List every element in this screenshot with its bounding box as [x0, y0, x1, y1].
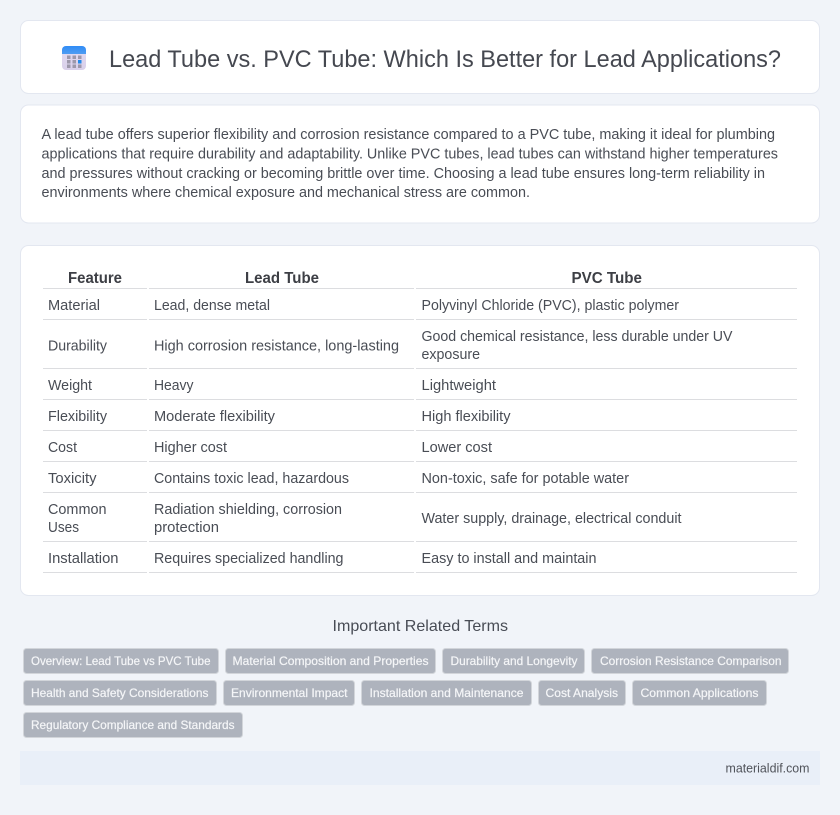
row: material	[48, 298, 679, 314]
row: common uses: Water supply, drainage, electrical conduit	[422, 511, 682, 527]
row: installation: Easy to install and maintain	[422, 551, 596, 567]
tags: related terms	[24, 648, 788, 738]
row: durability: High corrosion resistance, long-lasting	[154, 338, 399, 354]
row: common uses: Uses	[48, 520, 79, 536]
tags: related terms: Health and Safety Considerations	[31, 686, 208, 700]
row: material: Material	[48, 298, 100, 314]
text block: introduction: environments where chemical exposure and mechanical stress are common.	[42, 185, 530, 201]
heading: related terms: Important Related Terms	[332, 618, 508, 635]
row: durability	[48, 329, 733, 363]
row: toxicity: Non-toxic, safe for potable water	[422, 471, 629, 487]
row: weight: Weight	[48, 378, 92, 394]
tags: related terms: Corrosion Resistance Comparison	[600, 654, 782, 668]
tags: related terms: Cost Analysis	[546, 686, 618, 700]
row: cost	[48, 440, 492, 456]
row: common uses	[48, 502, 682, 536]
row: weight	[48, 378, 496, 394]
table header row: Feature	[68, 270, 122, 287]
row: flexibility: High flexibility	[422, 409, 511, 425]
row: cost: Lower cost	[422, 440, 492, 456]
tags: related terms: Overview: Lead Tube vs PVC Tube	[31, 654, 211, 668]
panel: comparison table	[20, 246, 820, 596]
row: common uses: protection	[154, 520, 219, 536]
row: common uses: Common	[48, 502, 106, 518]
row: cost: Cost	[48, 440, 77, 456]
row: weight: Lightweight	[422, 378, 496, 394]
row: installation: Installation	[48, 551, 118, 567]
tags: related terms: Durability and Longevity	[450, 654, 578, 668]
row: installation: Requires specialized handling	[154, 551, 344, 567]
tags: related terms: Common Applications	[640, 686, 758, 700]
row: weight: Heavy	[154, 378, 194, 394]
panel: header	[20, 20, 820, 94]
row: durability: Durability	[48, 338, 108, 354]
row: toxicity: Contains toxic lead, hazardous	[154, 471, 349, 487]
row: flexibility	[48, 409, 511, 425]
table header row: Lead Tube	[245, 270, 319, 287]
tags: related terms: Regulatory Compliance and Standards	[31, 718, 234, 732]
tags: related terms: Environmental Impact	[231, 686, 348, 700]
tags: related terms: Material Composition and Properties	[232, 654, 428, 668]
row: common uses: Radiation shielding, corrosion	[154, 502, 342, 518]
row: material: Polyvinyl Chloride (PVC), plastic polymer	[422, 298, 679, 314]
row: toxicity: Toxicity	[48, 471, 97, 487]
table header row	[68, 270, 642, 287]
row: flexibility: Flexibility	[48, 409, 108, 425]
footer: materialdif.com	[726, 762, 810, 776]
text block: introduction: applications that require durability and adaptability. Unlike PVC tubes, lead tubes can withstand higher temperatures	[42, 146, 778, 162]
table header row: PVC Tube	[572, 270, 642, 287]
tags: related terms: Installation and Maintenance	[370, 686, 524, 700]
panel: introduction	[20, 105, 820, 223]
row: cost: Higher cost	[154, 440, 227, 456]
icon: calendar	[62, 46, 86, 70]
row: durability: Good chemical resistance, less durable under UV	[422, 329, 733, 345]
footer	[20, 751, 820, 785]
title: Lead Tube vs. PVC Tube: Which Is Better for Lead Applications?	[109, 46, 781, 73]
row: durability: exposure	[422, 347, 480, 363]
text block: introduction	[42, 127, 778, 201]
text block: introduction: and pressures without cracking or becoming brittle over time. Choosing a lead tube ensures long-term reliability in	[42, 166, 765, 182]
row: toxicity	[48, 471, 629, 487]
row: installation	[48, 551, 596, 567]
row: material: Lead, dense metal	[154, 298, 270, 314]
row: flexibility: Moderate flexibility	[154, 409, 276, 425]
text block: introduction: A lead tube offers superior flexibility and corrosion resistance compared to a PVC tube, making it ideal for plumbing	[42, 127, 775, 143]
